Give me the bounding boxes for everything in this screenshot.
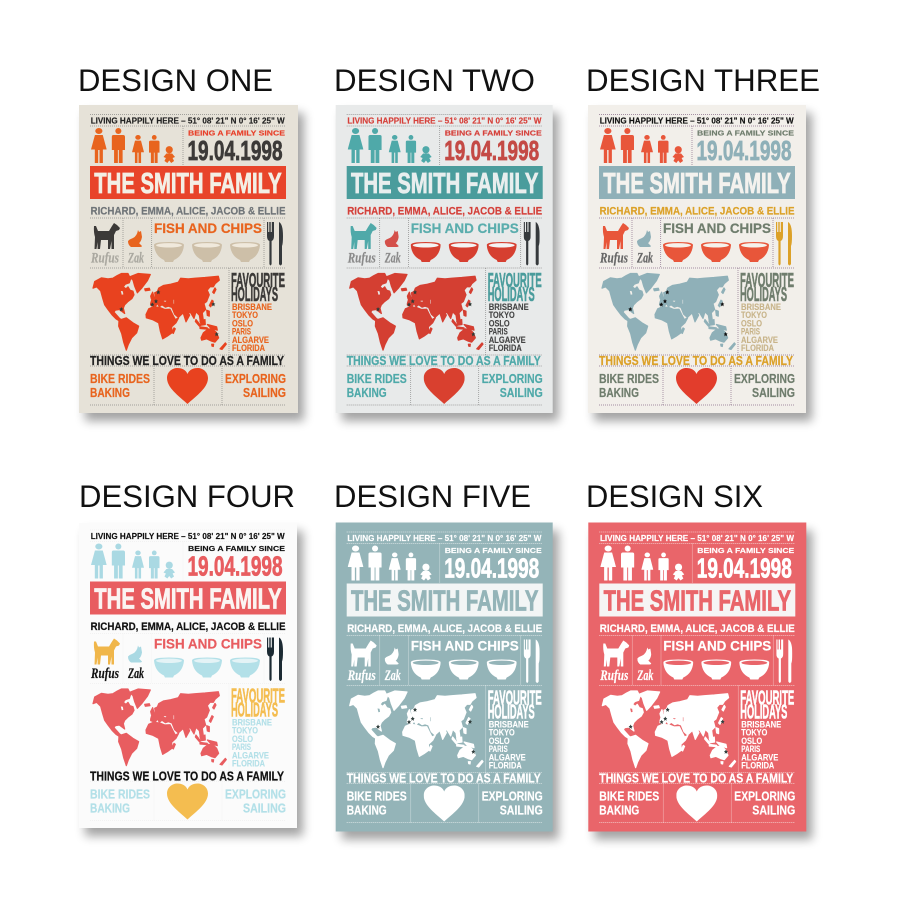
family figures <box>348 128 432 163</box>
family figures <box>91 544 175 578</box>
icon: cat <box>385 648 399 664</box>
activities left <box>347 790 407 818</box>
family member names: RICHARD, EMMA, ALICE, JACOB & ELLIE <box>600 206 794 218</box>
activities heading: THINGS WE LOVE TO DO AS A FAMILY <box>347 354 541 368</box>
activities right: SAILING <box>752 804 795 818</box>
holiday list: OSLO <box>741 318 762 328</box>
holiday list <box>741 302 781 353</box>
activities left <box>599 372 659 400</box>
date: 19.04.1998 <box>188 135 282 166</box>
pet name: rufus: Rufus <box>347 668 376 684</box>
icons: bowls <box>663 660 769 680</box>
favourite holidays heading: HOLIDAYS <box>488 284 535 306</box>
activities left: BAKING <box>90 386 130 400</box>
date: 19.04.1998 <box>188 550 282 582</box>
activities right: EXPLORING <box>734 790 795 804</box>
activities right: SAILING <box>243 386 286 400</box>
holiday list: BRISBANE <box>232 718 272 728</box>
poster: design three: FAVOURITE <box>740 270 794 292</box>
banner: family name <box>599 166 795 200</box>
activities right <box>225 788 286 816</box>
activities right: EXPLORING <box>734 372 795 386</box>
pet name: zak: Zak <box>127 666 144 682</box>
holiday list: TOKYO <box>741 728 767 738</box>
family figures <box>91 128 175 163</box>
holiday list: OSLO <box>232 318 253 328</box>
banner: family name <box>347 584 543 618</box>
family member names: RICHARD, EMMA, ALICE, JACOB & ELLIE <box>347 623 542 635</box>
pet name: zak: Zak <box>384 250 401 266</box>
holiday list: FLORIDA <box>741 760 775 770</box>
icons: bowls <box>663 242 769 262</box>
icon: cutlery <box>267 222 283 266</box>
activities right: EXPLORING <box>225 788 286 802</box>
banner: family name: THE SMITH FAMILY <box>94 584 282 616</box>
activities left: BIKE RIDES <box>90 372 150 386</box>
holiday list: FLORIDA <box>489 760 522 770</box>
icon: cutlery <box>524 222 540 266</box>
icon: cat <box>128 230 142 247</box>
activities left <box>90 788 150 816</box>
holiday list <box>489 720 529 770</box>
banner: family name <box>90 166 286 200</box>
icon: cat <box>637 230 651 247</box>
activities left: BAKING <box>599 386 639 400</box>
holiday list: OSLO <box>489 736 510 746</box>
favourite food: FISH AND CHIPS <box>663 638 771 654</box>
date: 19.04.1998 <box>444 552 539 584</box>
activities right: SAILING <box>500 804 543 818</box>
icon: cat <box>128 646 142 662</box>
favourite food: FISH AND CHIPS <box>663 221 771 236</box>
banner: family name: THE SMITH FAMILY <box>351 168 538 200</box>
activities left: BIKE RIDES <box>599 372 659 386</box>
holiday list: TOKYO <box>741 310 767 320</box>
pet name: zak: Zak <box>637 668 654 684</box>
icon: dog <box>603 223 629 249</box>
holiday list: FLORIDA <box>232 758 265 768</box>
holiday list: OSLO <box>489 318 510 328</box>
holiday list: PARIS <box>489 326 508 336</box>
activities right <box>734 790 795 818</box>
holiday list: BRISBANE <box>232 302 272 312</box>
icons: bowls <box>154 242 260 262</box>
coordinates line: LIVING HAPPILY HERE – 51° 08' 21" N 0° 16' 25" W <box>91 116 285 126</box>
activities right: EXPLORING <box>482 790 543 804</box>
poster: design four <box>79 523 303 836</box>
pet name: rufus: Rufus <box>90 666 119 682</box>
holiday list: BRISBANE <box>741 302 781 312</box>
favourite holidays heading: HOLIDAYS <box>740 284 787 306</box>
activities right <box>225 372 286 400</box>
family member names: RICHARD, EMMA, ALICE, JACOB & ELLIE <box>347 206 542 218</box>
icon: cutlery <box>776 222 792 266</box>
holiday list: ALGARVE <box>741 752 778 762</box>
icons: bowls <box>411 242 517 262</box>
icon: dog <box>603 640 629 666</box>
world map <box>93 689 226 766</box>
holiday list: PARIS <box>232 742 251 752</box>
favourite holidays heading <box>231 270 285 306</box>
activities right: SAILING <box>243 802 286 816</box>
holiday list: ALGARVE <box>489 335 526 345</box>
activities right: SAILING <box>500 386 543 400</box>
heading: design five: DESIGN FIVE <box>334 478 531 514</box>
world map <box>350 273 483 350</box>
favourite holidays heading: HOLIDAYS <box>488 702 535 724</box>
banner: family name <box>599 584 795 618</box>
date: 19.04.1998 <box>444 135 539 166</box>
holiday list: FLORIDA <box>489 343 522 353</box>
holiday list <box>741 720 781 770</box>
holiday list: PARIS <box>741 744 760 754</box>
pet name: rufus: Rufus <box>600 668 628 684</box>
holiday list <box>232 718 272 768</box>
activities left: BIKE RIDES <box>347 790 407 804</box>
pet name: rufus: Rufus <box>347 250 376 266</box>
holiday list: TOKYO <box>489 728 515 738</box>
holiday list: TOKYO <box>489 310 515 320</box>
holiday list: TOKYO <box>232 310 258 320</box>
icons: bowls <box>411 660 517 680</box>
activities left <box>347 372 407 400</box>
icon: heart <box>424 786 465 822</box>
activities right <box>482 372 543 400</box>
poster: design one: FAVOURITE <box>231 270 285 292</box>
family since label: BEING A FAMILY SINCE <box>445 546 542 555</box>
holiday list: PARIS <box>741 326 760 336</box>
poster: design one <box>79 105 304 421</box>
holiday list: OSLO <box>232 734 253 744</box>
activities right: EXPLORING <box>482 372 543 386</box>
poster: design three <box>588 105 812 421</box>
activities left: BIKE RIDES <box>599 790 659 804</box>
family figures <box>348 546 432 580</box>
holiday list: ALGARVE <box>741 335 778 345</box>
icon: dog <box>351 223 377 249</box>
coordinates line: LIVING HAPPILY HERE – 51° 08' 21" N 0° 16' 25" W <box>91 532 285 541</box>
icon: heart <box>676 368 717 404</box>
holiday list: ALGARVE <box>232 335 269 345</box>
activities left: BAKING <box>599 804 639 818</box>
family member names: RICHARD, EMMA, ALICE, JACOB & ELLIE <box>90 621 286 633</box>
activities left <box>599 790 659 818</box>
activities right <box>482 790 543 818</box>
world map <box>602 691 736 768</box>
poster: design five <box>336 522 559 840</box>
activities left: BAKING <box>347 386 387 400</box>
icon: heart <box>167 368 208 404</box>
activities heading: THINGS WE LOVE TO DO AS A FAMILY <box>347 772 541 786</box>
family figures <box>600 546 684 580</box>
coordinates line: LIVING HAPPILY HERE – 51° 08' 21" N 0° 16' 25" W <box>347 116 542 126</box>
poster: design two: FAVOURITE <box>488 270 542 292</box>
heading: design four: DESIGN FOUR <box>79 478 295 514</box>
poster: design six: FAVOURITE <box>740 688 794 710</box>
holiday list: PARIS <box>232 326 251 336</box>
coordinates line: LIVING HAPPILY HERE – 51° 08' 21" N 0° 16' 25" W <box>600 534 794 543</box>
world map <box>93 273 226 350</box>
activities heading: THINGS WE LOVE TO DO AS A FAMILY <box>599 772 794 786</box>
holiday list: BRISBANE <box>489 720 529 730</box>
holiday list: TOKYO <box>232 726 258 736</box>
banner: family name: THE SMITH FAMILY <box>603 168 791 200</box>
coordinates line: LIVING HAPPILY HERE – 51° 08' 21" N 0° 16' 25" W <box>347 534 542 543</box>
favourite holidays heading: HOLIDAYS <box>231 284 278 306</box>
activities left: BIKE RIDES <box>347 372 407 386</box>
family since label: BEING A FAMILY SINCE <box>188 129 285 138</box>
banner: family name: THE SMITH FAMILY <box>604 586 791 618</box>
holiday list: FLORIDA <box>741 343 774 353</box>
family member names: RICHARD, EMMA, ALICE, JACOB & ELLIE <box>90 206 286 218</box>
world map <box>350 691 483 768</box>
icon: cat <box>385 230 399 247</box>
favourite food: FISH AND CHIPS <box>411 221 519 236</box>
holiday list <box>489 302 529 353</box>
icon: cat <box>637 648 651 664</box>
icon: dog <box>94 223 120 249</box>
holiday list: OSLO <box>741 736 762 746</box>
favourite holidays heading: HOLIDAYS <box>740 702 787 724</box>
poster: design two <box>336 105 559 421</box>
holiday list: ALGARVE <box>489 752 526 762</box>
holiday list: ALGARVE <box>232 750 269 760</box>
banner: family name: THE SMITH FAMILY <box>351 586 538 618</box>
activities heading: THINGS WE LOVE TO DO AS A FAMILY <box>599 354 794 368</box>
date: 19.04.1998 <box>697 552 792 584</box>
pet name: rufus: Rufus <box>90 250 119 266</box>
holiday list <box>232 302 272 353</box>
family member names: RICHARD, EMMA, ALICE, JACOB & ELLIE <box>600 623 795 635</box>
heading: design one: DESIGN ONE <box>78 62 273 98</box>
activities right <box>734 372 795 400</box>
favourite food: FISH AND CHIPS <box>154 221 262 236</box>
activities heading: THINGS WE LOVE TO DO AS A FAMILY <box>90 770 285 784</box>
date: 19.04.1998 <box>696 135 792 166</box>
icon: cutlery <box>524 640 540 683</box>
family since label: BEING A FAMILY SINCE <box>697 129 794 138</box>
holiday list: FLORIDA <box>232 343 265 353</box>
banner: family name <box>347 166 543 200</box>
poster: design six <box>588 522 812 840</box>
heading: design two: DESIGN TWO <box>334 62 535 98</box>
holiday list: BRISBANE <box>489 302 529 312</box>
icons: bowls <box>154 658 260 678</box>
activities left <box>90 372 150 400</box>
coordinates line: LIVING HAPPILY HERE – 51° 08' 21" N 0° 16' 25" W <box>600 116 794 126</box>
poster: design five: FAVOURITE <box>488 688 542 710</box>
activities left: BIKE RIDES <box>90 788 150 802</box>
holiday list: BRISBANE <box>741 720 781 730</box>
favourite food: FISH AND CHIPS <box>411 638 519 654</box>
favourite holidays heading <box>231 686 285 722</box>
activities right: EXPLORING <box>225 372 286 386</box>
family since label: BEING A FAMILY SINCE <box>445 129 542 138</box>
holiday list: PARIS <box>489 744 508 754</box>
favourite holidays heading <box>740 688 794 724</box>
pet name: zak: Zak <box>636 250 653 266</box>
icon: heart <box>424 368 465 404</box>
pet name: zak: Zak <box>127 250 144 266</box>
icon: heart <box>167 784 208 820</box>
pet name: rufus: Rufus <box>599 250 628 266</box>
heading: design three: DESIGN THREE <box>586 62 820 98</box>
icon: dog <box>351 640 377 666</box>
icon: heart <box>676 786 717 822</box>
poster: design four: FAVOURITE <box>231 686 285 708</box>
heading: design six: DESIGN SIX <box>586 478 763 514</box>
pet name: zak: Zak <box>384 668 401 684</box>
favourite holidays heading <box>488 688 542 724</box>
activities right: SAILING <box>752 386 795 400</box>
icon: cutlery <box>267 638 283 681</box>
activities heading: THINGS WE LOVE TO DO AS A FAMILY <box>90 354 285 368</box>
activities left: BAKING <box>90 802 130 816</box>
family since label: BEING A FAMILY SINCE <box>697 546 794 555</box>
banner: family name <box>90 582 286 616</box>
icon: cutlery <box>776 640 792 683</box>
favourite holidays heading: HOLIDAYS <box>231 700 278 722</box>
favourite holidays heading <box>740 270 794 306</box>
favourite food: FISH AND CHIPS <box>154 636 262 652</box>
favourite holidays heading <box>488 270 542 306</box>
family figures <box>600 128 684 163</box>
activities left: BAKING <box>347 804 387 818</box>
world map <box>602 273 735 350</box>
banner: family name: THE SMITH FAMILY <box>94 168 282 200</box>
icon: dog <box>94 638 120 664</box>
family since label: BEING A FAMILY SINCE <box>188 544 285 553</box>
